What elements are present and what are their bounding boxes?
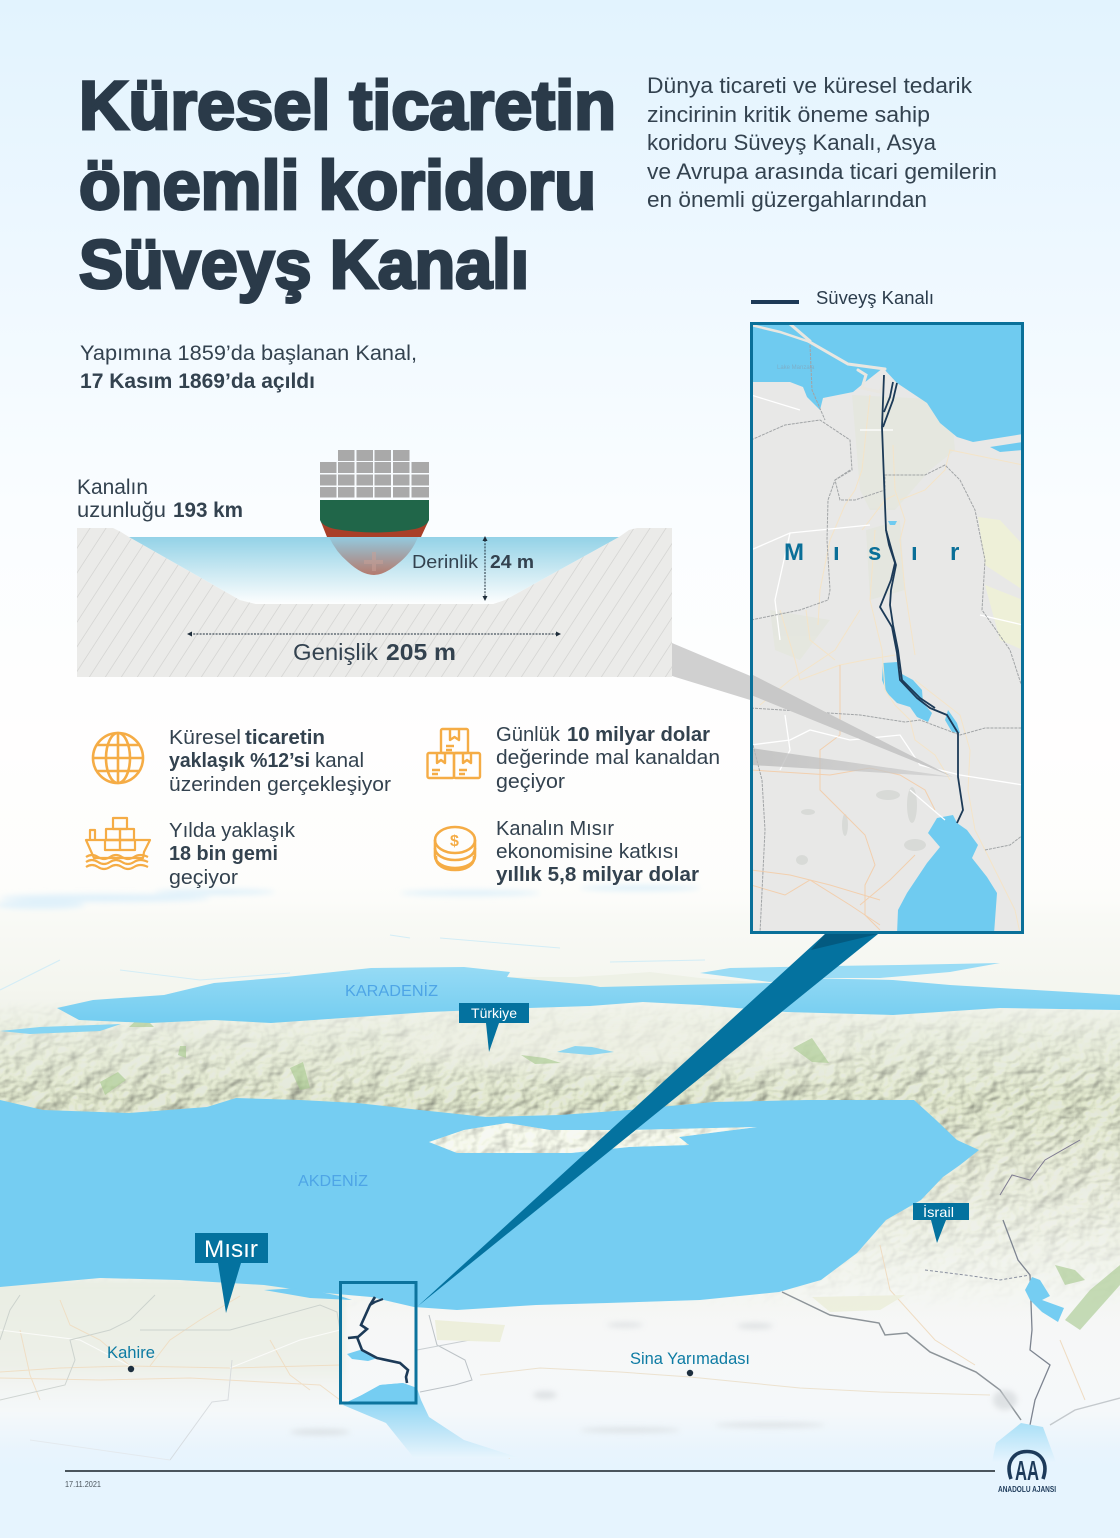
callout: İsrail bbox=[913, 1203, 969, 1243]
borders bbox=[751, 345, 1023, 933]
submerged hull bbox=[329, 537, 418, 575]
intro paragraph: zincirinin kritik öneme sahip bbox=[647, 102, 930, 127]
sea label: Black Sea: KARADENİZ bbox=[345, 981, 438, 1000]
farmland in northern Sinai bbox=[812, 1295, 905, 1312]
title: Süveyş Kanalı bbox=[79, 226, 529, 303]
stat: global trade: Küresel bbox=[169, 727, 241, 749]
Nile delta roads bbox=[0, 1295, 340, 1460]
intro paragraph: koridoru Süveyş Kanalı, Asya bbox=[647, 130, 937, 155]
yellow farmland bbox=[978, 517, 1023, 650]
northern rivers and lakes bbox=[0, 935, 705, 990]
place: Kahire bbox=[107, 1343, 155, 1372]
logo: Anadolu Ajansı: AA bbox=[1015, 1455, 1039, 1486]
sea and Lake Manzala bbox=[751, 323, 1023, 442]
Lake Manzala label: Lake Manzala bbox=[777, 365, 815, 371]
title bbox=[79, 67, 616, 303]
intro paragraph: ve Avrupa arasında ticari gemilerin bbox=[647, 159, 997, 184]
place: Sina Yarımadası bbox=[630, 1349, 750, 1376]
stat: daily value: değerinde mal kanaldan bbox=[496, 747, 720, 769]
mountains bbox=[796, 787, 926, 865]
place: Kahire: Kahire bbox=[107, 1343, 155, 1362]
stat: revenue: ekonomisine katkısı bbox=[496, 841, 679, 863]
Tuz Lake bbox=[557, 1046, 614, 1055]
stat: ships per year: geçiyor bbox=[169, 867, 238, 889]
callout: Türkiye: Türkiye bbox=[471, 1005, 517, 1021]
3D relief map of Eastern Mediterranean bbox=[0, 880, 1120, 1538]
construction dates bbox=[80, 342, 417, 393]
Sinai mountain shading bbox=[290, 1322, 1017, 1435]
depth label: Derinlik bbox=[412, 552, 479, 572]
place: Sina Yarımadası: Sina Yarımadası bbox=[630, 1349, 750, 1368]
logo: Anadolu Ajansı bbox=[998, 1452, 1056, 1494]
stat: daily value: Günlük bbox=[496, 724, 561, 746]
red hull bbox=[321, 522, 428, 537]
canal length label: uzunluğu bbox=[77, 499, 166, 522]
excavated ground bbox=[77, 528, 672, 677]
map frame bbox=[752, 324, 1022, 932]
Crimea bbox=[507, 972, 770, 987]
farmland near canal bbox=[435, 1320, 505, 1342]
stat: global trade bbox=[169, 727, 391, 796]
canal cross-section bbox=[77, 450, 672, 677]
grey wedge over map bbox=[751, 674, 953, 777]
forested patches bbox=[100, 1015, 1120, 1330]
Little Bitter Lake bbox=[945, 710, 960, 733]
green farmland bbox=[770, 395, 955, 660]
water bbox=[129, 537, 619, 604]
width arrow bbox=[187, 632, 561, 636]
faded northern water wisps bbox=[0, 885, 700, 909]
stat: global trade: ticaretin bbox=[245, 727, 325, 749]
coastal sandbars bbox=[753, 325, 886, 386]
stat: ships per year bbox=[169, 820, 296, 889]
grey section-to-map connector outside map bbox=[672, 643, 760, 703]
blue zoom wedge bbox=[418, 934, 878, 1306]
Nile delta land bbox=[0, 1280, 345, 1420]
stat: ships per year: 18 bin gemi bbox=[169, 843, 278, 865]
stat: global trade: üzerinden gerçekleşiyor bbox=[169, 774, 391, 796]
stat: revenue bbox=[496, 818, 699, 886]
title: Küresel ticaretin bbox=[79, 67, 616, 144]
hull cross bbox=[364, 552, 383, 571]
construction dates: Yapımına 1859’da başlanan Kanal, bbox=[80, 342, 417, 365]
title: önemli koridoru bbox=[79, 147, 596, 224]
canal route bbox=[880, 375, 963, 823]
Jordan border bbox=[1003, 1220, 1050, 1425]
callout: Mısır: Mısır bbox=[204, 1236, 258, 1263]
stat: global trade: kanal bbox=[315, 750, 364, 772]
Gulf of Suez within box bbox=[345, 1383, 417, 1404]
width label: 205 m bbox=[386, 639, 456, 665]
callout: Mısır bbox=[195, 1233, 268, 1313]
intro paragraph bbox=[647, 73, 997, 212]
stat: revenue: Kanalın Mısır bbox=[496, 818, 614, 840]
icon: coins: $ bbox=[450, 833, 459, 850]
Gulf of Aqaba bbox=[992, 1423, 1056, 1462]
stat: daily value: 10 milyar dolar bbox=[567, 724, 710, 746]
intro paragraph: en önemli güzergahlarından bbox=[647, 187, 927, 212]
Levant roads bbox=[880, 1140, 1120, 1425]
footer rule bbox=[65, 1470, 995, 1472]
country label: Mısır bbox=[784, 539, 959, 566]
date: 17.11.2021 bbox=[65, 1479, 101, 1489]
canal length label: Kanalın bbox=[77, 476, 148, 499]
legend: Süveyş Kanalı bbox=[816, 288, 934, 308]
stat: revenue: yıllık 5,8 milyar dolar bbox=[496, 864, 699, 886]
road network bbox=[751, 395, 1023, 933]
green hull bbox=[320, 500, 429, 532]
construction dates: 17 Kasım 1869’da açıldı bbox=[80, 370, 315, 393]
icon: boxes bbox=[428, 729, 480, 778]
depth label bbox=[412, 552, 534, 572]
Egypt-Israel border bbox=[782, 1292, 1021, 1420]
canal length label: 193 km bbox=[173, 499, 243, 522]
stat: daily value: geçiyor bbox=[496, 771, 565, 793]
Sea of Azov bbox=[700, 963, 1000, 982]
depth label: 24 m bbox=[490, 552, 534, 572]
Marmara Sea bbox=[0, 1024, 121, 1034]
logo: Anadolu Ajansı: ANADOLU AJANSI bbox=[998, 1484, 1056, 1494]
ship bbox=[320, 450, 429, 575]
Black Sea bbox=[57, 967, 1120, 1023]
Dead Sea and Jordan bbox=[1025, 1277, 1064, 1322]
icon: container ship bbox=[86, 818, 150, 869]
wedge dark tip bbox=[811, 934, 878, 950]
canal length label bbox=[77, 476, 243, 522]
Gulf of Suez bbox=[343, 1383, 520, 1458]
Great Bitter Lake bbox=[882, 662, 932, 722]
stat: ships per year: Yılda yaklaşık bbox=[169, 820, 296, 842]
Cyprus bbox=[429, 1123, 757, 1153]
stat: global trade: yaklaşık %12’si bbox=[169, 750, 310, 772]
Sinai roads and borders bbox=[417, 1315, 990, 1458]
width label bbox=[293, 639, 456, 665]
map land bbox=[751, 323, 1023, 933]
legend bbox=[751, 288, 934, 308]
land base bbox=[0, 880, 1120, 1538]
icon: coins bbox=[435, 827, 475, 870]
intro paragraph: Dünya ticareti ve küresel tedarik bbox=[647, 73, 973, 98]
locator box with canal bbox=[340, 1282, 416, 1403]
terrain texture bbox=[0, 1010, 1120, 1290]
Mediterranean Sea bbox=[0, 1098, 979, 1310]
Gulf of Suez bbox=[897, 815, 997, 934]
callout: Türkiye bbox=[459, 1003, 529, 1052]
width label: Genişlik bbox=[293, 639, 379, 665]
sea label: Mediterranean: AKDENİZ bbox=[298, 1171, 368, 1190]
Delta coastal lagoons bbox=[264, 1288, 352, 1300]
depth arrow bbox=[482, 536, 488, 601]
stat: daily value bbox=[496, 724, 720, 793]
Mini map: Bitter Lake bbox=[347, 1350, 378, 1361]
map panel: Suez Canal bbox=[751, 323, 1023, 934]
Timsah lake bbox=[888, 521, 897, 525]
icon: globe bbox=[93, 733, 143, 783]
central plateau lightening bbox=[390, 1021, 850, 1069]
containers bbox=[320, 450, 429, 498]
callout: İsrail: İsrail bbox=[923, 1203, 954, 1220]
